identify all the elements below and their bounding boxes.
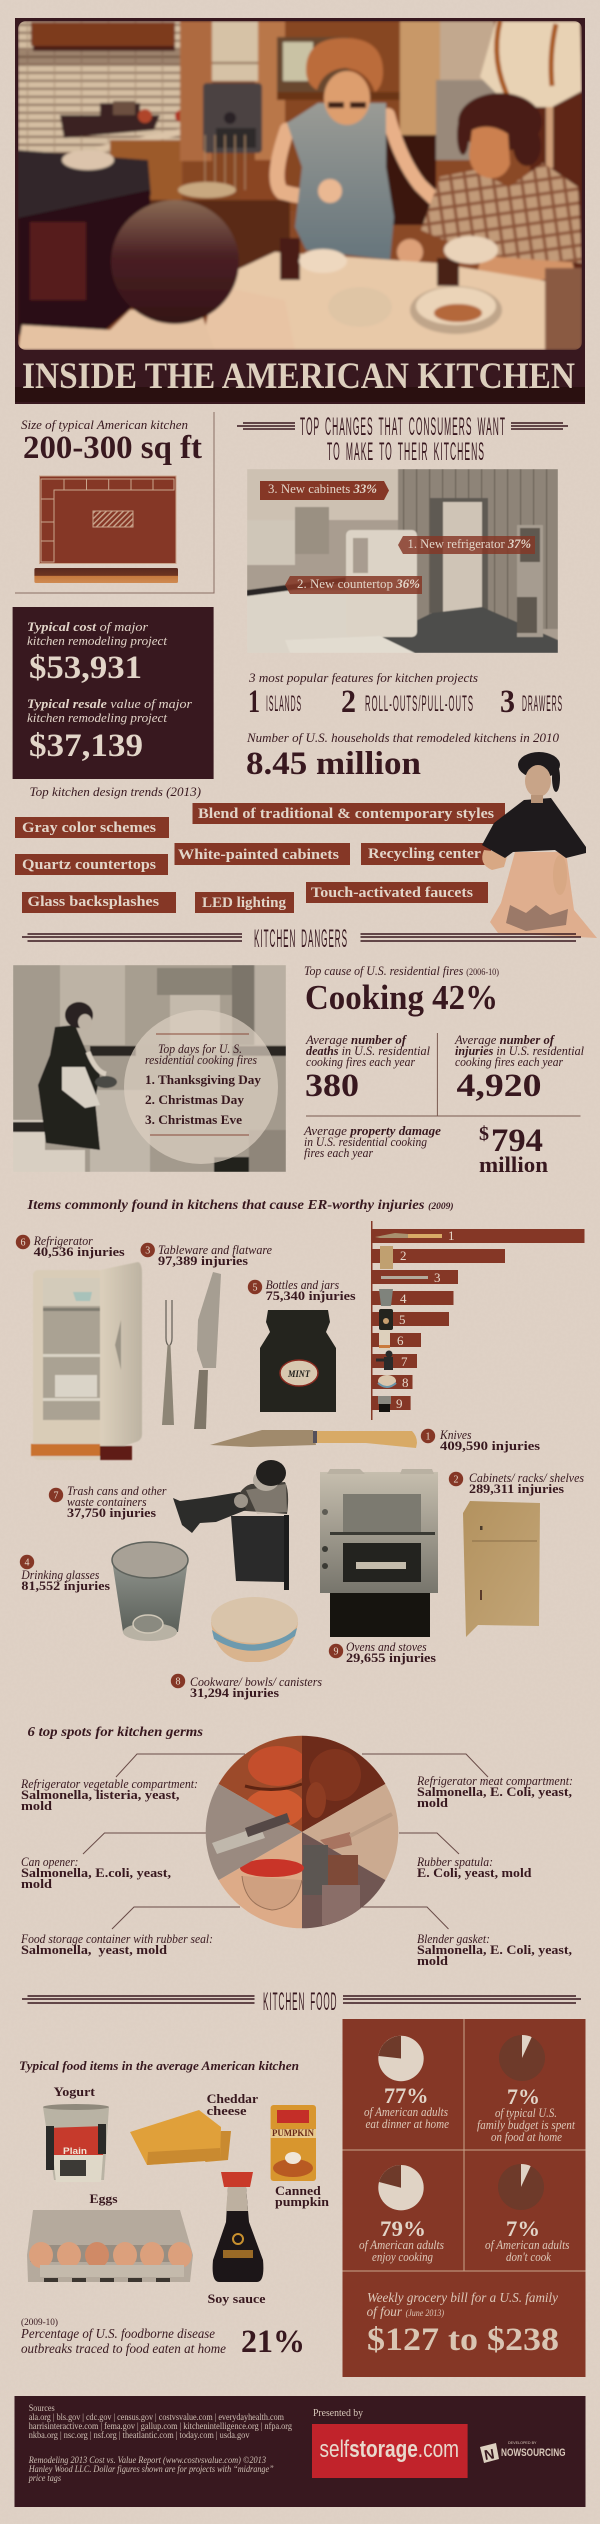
food: cheddar cheese: cheese — [207, 2103, 247, 2118]
icon: knife — [210, 1430, 417, 1448]
heading: germ spots: 6 top spots for kitchen germs — [28, 1725, 204, 1740]
item: knives: 1 — [426, 1432, 430, 1442]
germ label: vegetable compartment: Salmonella, listeria, yeast, — [21, 1787, 180, 1802]
germ label: vegetable compartment: Refrigerator vegetable compartment: — [20, 1776, 198, 1791]
injuries: injuries in U.S. residential — [455, 1043, 584, 1058]
item: tableware: Tableware and flatware — [158, 1242, 272, 1257]
wedge: spatula — [302, 1784, 398, 1880]
bar 7 trash can: 7 — [401, 1354, 408, 1369]
tag: blend: Blend of traditional & contemporary styles — [198, 806, 494, 822]
bar 5 bottles — [372, 1309, 449, 1330]
photo: vintage kitchen with change labels — [247, 469, 558, 653]
stat: 77 percent: of American adults — [364, 2104, 448, 2119]
logo: selfstorage: selfstorage.com — [320, 2436, 459, 2463]
item: bottles and jars — [248, 1277, 356, 1412]
pie 7 budget — [499, 2035, 545, 2081]
stat: foodborne outbreaks — [20, 2317, 305, 2360]
item: ovens and stoves — [320, 1469, 438, 1665]
heading: ER injuries: Items commonly found in kitchens that cause ER-worthy injuries (2009) — [26, 1198, 453, 1213]
item: refrigerator: 40,536 injuries — [34, 1244, 125, 1259]
icon: cabinet — [463, 1501, 540, 1637]
top cause: Cooking 42% — [305, 978, 498, 1017]
item: cabinets: Cabinets/ racks/ shelves — [469, 1470, 584, 1485]
copyright note: price tags — [28, 2473, 61, 2483]
top cause: Top cause of U.S. residential fires (2006-10) — [304, 963, 499, 978]
germ label: can opener: Can opener: — [21, 1854, 78, 1869]
germ label: can opener: mold — [21, 1876, 53, 1891]
stat: 79 percent: enjoy cooking — [372, 2249, 433, 2264]
photo: woman cooking with top days circle — [13, 965, 286, 1172]
item: trash cans: waste containers — [67, 1494, 147, 1509]
logo: nowsourcing: NOWSOURCING — [501, 2447, 566, 2459]
icon: cheese — [130, 2110, 231, 2165]
circle callout: top days — [124, 1010, 278, 1164]
germ label: meat compartment: mold — [417, 1795, 449, 1810]
food: canned pumpkin — [271, 2105, 330, 2209]
item: cookware: 31,294 injuries — [190, 1685, 279, 1700]
feature 3 drawers: 3 — [500, 684, 515, 720]
sources: nkba.org | nsc.org | nsf.org | theatlantic.com | today.com | usda.gov — [29, 2430, 250, 2440]
chart: germ spots pie of photos — [82, 1736, 488, 1930]
tag: touch: Touch-activated faucets — [311, 885, 473, 901]
stat: weekly grocery bill: Weekly grocery bill for a U.S. family — [367, 2291, 559, 2306]
germ label: can opener — [21, 1854, 171, 1891]
stat: 7 percent don't cook: don't cook — [506, 2249, 551, 2264]
item: tableware: 3 — [145, 1246, 150, 1256]
item: ovens and stoves: 9 — [334, 1646, 338, 1658]
item: drinking glasses: 4 — [24, 1558, 30, 1568]
item: cabinets — [449, 1470, 584, 1637]
header photo and title — [15, 18, 585, 404]
top cause — [304, 963, 499, 1017]
bar 2 cabinets: 2 — [400, 1248, 406, 1263]
injuries — [454, 1032, 584, 1104]
tag: white cabinets: White-painted cabinets — [178, 847, 339, 863]
logo: nowsourcing — [480, 2441, 566, 2463]
typical cost: Typical cost of major — [27, 619, 149, 634]
item: drinking glasses: 81,552 injuries — [21, 1578, 110, 1593]
households stat: 8.45 million — [246, 746, 421, 782]
typical cost — [27, 619, 167, 686]
item: refrigerator — [16, 1233, 142, 1460]
stat: 7 percent budget: family budget is spent — [477, 2117, 575, 2132]
heading: typical food: Typical food items in the average American kitchen — [19, 2058, 299, 2073]
sources: Sources — [29, 2403, 55, 2413]
stat: 77 percent: 77% — [384, 2083, 429, 2108]
stat: 79 percent — [359, 2165, 444, 2264]
germ label: blender gasket: Salmonella, E. Coli, yeast, — [417, 1942, 572, 1957]
food: yogurt: Yogurt — [54, 2084, 96, 2099]
item: cookware: 8 — [176, 1676, 180, 1688]
germ label: vegetable compartment — [20, 1776, 198, 1813]
icon: bowl — [211, 1597, 298, 1662]
design trends: Top kitchen design trends (2013) — [30, 784, 201, 799]
stat: 7 percent budget: 7% — [507, 2084, 540, 2109]
copyright note: Remodeling 2013 Cost vs. Value Report (www.costvsvalue.com) ©2013 — [28, 2455, 266, 2465]
bar 2 cabinets — [372, 1246, 505, 1269]
heading: kitchen food — [22, 1988, 581, 2016]
stat: 79 percent: 79% — [380, 2216, 426, 2241]
typical resale value: kitchen remodeling project — [27, 710, 167, 725]
deaths: Average number of — [305, 1032, 408, 1047]
icon: yogurt tub: Plain — [63, 2146, 87, 2156]
item: tableware: 97,389 injuries — [158, 1253, 248, 1268]
stat: 77 percent: eat dinner at home — [366, 2116, 449, 2131]
stat: weekly grocery bill: (June 2013) — [406, 2308, 444, 2318]
presented by: Presented by — [313, 2408, 363, 2419]
typical resale value — [27, 696, 193, 764]
wedge: can opener — [206, 1784, 302, 1880]
deaths: cooking fires each year — [306, 1054, 416, 1069]
bar 1 knives: 1 — [448, 1228, 454, 1243]
photo: family dinner in kitchen — [18, 21, 582, 350]
panel: remodeling cost — [13, 607, 214, 779]
diner from behind — [18, 198, 240, 350]
feature 3 drawers — [500, 684, 563, 720]
stat: 7 percent budget: on food at home — [491, 2129, 562, 2144]
panel: kitchen size — [15, 412, 214, 593]
injuries: 4,920 — [456, 1068, 542, 1104]
heading: kitchen food: KITCHEN FOOD — [263, 1988, 338, 2016]
item: tableware — [140, 1242, 272, 1429]
item: knives — [210, 1427, 540, 1453]
logo: nowsourcing: N — [483, 2445, 496, 2463]
bar 4 glasses — [372, 1289, 454, 1306]
stat: weekly grocery bill: of four — [367, 2305, 403, 2320]
bar 6 refrigerator: 6 — [397, 1333, 404, 1348]
feature 2 roll-outs: 2 — [341, 684, 356, 720]
icon: boy in trash can — [173, 1460, 289, 1590]
typical cost: $53,931 — [29, 650, 142, 686]
tag: recycling — [361, 843, 491, 865]
deaths: deaths in U.S. residential — [306, 1043, 430, 1058]
pie 79 — [378, 2165, 424, 2210]
table with dishes — [199, 236, 582, 350]
bar 8 cookware — [372, 1375, 412, 1390]
bar 4 glasses: 4 — [400, 1291, 407, 1306]
tag: quartz: Quartz countertops — [22, 857, 156, 873]
germ label: blender gasket: Blender gasket: — [417, 1931, 490, 1946]
item: bottles and jars: 5 — [252, 1282, 258, 1294]
injuries: cooking fires each year — [455, 1054, 564, 1069]
food: canned pumpkin: Canned — [275, 2183, 321, 2198]
sources: harrisinteractive.com | fema.gov | gallup.com | kitchenintelligence.org | nfpa.org — [29, 2421, 292, 2431]
item: bottles and jars: 75,340 injuries — [266, 1288, 356, 1303]
copyright note — [28, 2455, 274, 2483]
item: trash cans — [49, 1460, 289, 1590]
woman serving — [268, 36, 437, 260]
bar 8 cookware: 8 — [402, 1375, 408, 1390]
wedge: container — [218, 1832, 304, 1928]
illustration: woman in apron — [482, 752, 597, 938]
item: drinking glasses — [20, 1542, 188, 1641]
stat: foodborne outbreaks: outbreaks traced to food eaten at home — [21, 2342, 226, 2357]
sources: ala.org | bls.gov | cdc.gov | census.gov | costvsvalue.com | everydayhealth.com — [29, 2412, 284, 2422]
stat: foodborne outbreaks: Percentage of U.S. foodborne disease — [20, 2327, 215, 2342]
circle callout: top days: 1. Thanksgiving Day — [145, 1072, 262, 1087]
icon: fork and knife — [162, 1272, 221, 1429]
bar 9 ovens — [372, 1396, 411, 1412]
ruler — [34, 568, 178, 583]
label: new cabinets: 3. New cabinets 33% — [268, 481, 377, 496]
item: knives: 409,590 injuries — [440, 1438, 540, 1453]
icon: soy bottle — [213, 2172, 263, 2282]
item: cabinets: 2 — [454, 1474, 458, 1486]
heading: kitchen dangers: KITCHEN DANGERS — [254, 925, 348, 953]
stat: 7 percent don't cook: of American adults — [485, 2237, 570, 2252]
size value: 200-300 sq ft — [23, 430, 202, 466]
food: canned pumpkin: pumpkin — [275, 2194, 330, 2209]
stat: 77 percent — [364, 2036, 449, 2131]
property damage: million — [479, 1152, 548, 1177]
bar 3 tableware: 3 — [434, 1270, 440, 1285]
germ label: meat compartment: Refrigerator meat compartment: — [416, 1773, 573, 1788]
icon: oven — [320, 1469, 438, 1637]
property damage: in U.S. residential cooking — [304, 1134, 427, 1149]
tag: gray — [15, 817, 169, 838]
stat: weekly grocery bill — [367, 2291, 559, 2358]
label: new refrigerator: 1. New refrigerator 37% — [408, 536, 531, 551]
stat: foodborne outbreaks: 21% — [241, 2324, 305, 2360]
tag: glass: Glass backsplashes — [28, 894, 159, 910]
feature 1 islands — [248, 684, 302, 720]
stat: 7 percent budget: of typical U.S. — [495, 2105, 557, 2120]
wedge: vegetables — [218, 1736, 302, 1832]
wedge: blender — [302, 1832, 386, 1928]
item: refrigerator: 6 — [20, 1238, 26, 1248]
logo: nowsourcing: DEVELOPED BY — [508, 2441, 537, 2445]
bar 5 bottles: 5 — [399, 1312, 406, 1327]
item: drinking glasses: Drinking glasses — [21, 1567, 99, 1582]
bar 9 ovens: 9 — [396, 1396, 402, 1411]
germ label: can opener: Salmonella, E.coli, yeast, — [21, 1865, 171, 1880]
food: cheddar cheese: Cheddar — [207, 2091, 258, 2106]
item: refrigerator: Refrigerator — [33, 1233, 94, 1248]
tag: recycling: Recycling center — [368, 846, 481, 862]
item: trash cans: 37,750 injuries — [67, 1505, 156, 1520]
item: ovens and stoves: Ovens and stoves — [346, 1639, 427, 1654]
germ label: rubber spatula: E. Coli, yeast, mold — [417, 1865, 532, 1880]
germ label: food storage: Food storage container with rubber seal: — [20, 1931, 213, 1946]
bar 1 knives — [372, 1228, 584, 1243]
stat: 7 percent don't cook: 7% — [506, 2216, 540, 2241]
icon: refrigerator — [31, 1262, 142, 1460]
typical resale value: $37,139 — [29, 728, 143, 764]
property damage — [303, 1123, 548, 1177]
property damage: Average property damage — [303, 1123, 441, 1138]
bar 6 refrigerator — [372, 1330, 421, 1350]
wedge: meat — [302, 1736, 386, 1832]
food: eggs — [27, 2191, 193, 2282]
icon: egg carton — [27, 2210, 193, 2282]
food: cheddar cheese — [130, 2091, 258, 2165]
stat: 7 percent don't cook — [485, 2164, 570, 2264]
circle callout: top days: 2. Christmas Day — [145, 1092, 245, 1107]
item: cookware: Cookware/ bowls/ canisters — [190, 1674, 322, 1689]
bar 3 tableware — [372, 1270, 458, 1285]
tag: led: LED lighting — [202, 895, 286, 911]
item: cookware — [171, 1597, 322, 1700]
property damage: 794 — [491, 1123, 543, 1159]
germ label: meat compartment: Salmonella, E. Coli, yeast, — [417, 1784, 572, 1799]
stat: foodborne outbreaks: (2009-10) — [21, 2317, 58, 2327]
item: cabinets: 289,311 injuries — [469, 1481, 564, 1496]
food: soy sauce: Soy sauce — [208, 2291, 266, 2306]
germ label: rubber spatula: Rubber spatula: — [416, 1854, 493, 1869]
sources — [29, 2403, 292, 2440]
germ label: food storage: Salmonella, yeast, mold — [21, 1942, 168, 1957]
icon: jar: MINT — [287, 1369, 310, 1379]
stove — [18, 150, 152, 335]
item: trash cans: 7 — [54, 1490, 58, 1502]
germ label: food storage — [20, 1931, 213, 1957]
feature 2 roll-outs — [341, 684, 474, 720]
stat: 79 percent: of American adults — [359, 2237, 444, 2252]
icon: can: PUMPKIN — [272, 2128, 314, 2138]
popular features — [248, 670, 563, 720]
deaths — [305, 1032, 430, 1104]
tag: gray: Gray color schemes — [22, 820, 156, 836]
logo: selfstorage — [312, 2424, 468, 2478]
feature 1 islands: 1 — [248, 684, 260, 720]
label: new cabinets — [260, 481, 389, 500]
item: knives: Knives — [439, 1427, 472, 1442]
stat: weekly grocery bill: $127 to $238 — [367, 2322, 559, 2358]
footer — [14, 2396, 586, 2507]
property damage: $ — [479, 1123, 489, 1145]
panel: food statistics — [342, 2019, 586, 2377]
germ label: blender gasket — [417, 1931, 572, 1968]
label: new countertop: 2. New countertop 36% — [297, 576, 420, 591]
popular features: 3 most popular features for kitchen projects — [248, 670, 478, 685]
circle callout: top days: residential cooking fires — [145, 1052, 257, 1067]
germ label: blender gasket: mold — [417, 1953, 449, 1968]
germ label: vegetable compartment: mold — [21, 1798, 53, 1813]
deaths: 380 — [305, 1068, 359, 1104]
tag: led — [195, 892, 294, 913]
germ label: rubber spatula — [416, 1854, 532, 1880]
pie 7 no cook — [498, 2164, 544, 2210]
item: ovens and stoves: 29,655 injuries — [346, 1650, 436, 1665]
size label: Size of typical American kitchen — [21, 417, 188, 432]
item: bottles and jars: Bottles and jars — [266, 1277, 339, 1292]
pie 77 — [378, 2036, 424, 2081]
injuries: Average number of — [454, 1032, 556, 1047]
item: trash cans: Trash cans and other — [67, 1483, 167, 1498]
circle callout: top days: 3. Christmas Eve — [145, 1112, 242, 1127]
bar 7 trash can — [372, 1350, 417, 1370]
tag: blend — [192, 803, 505, 824]
typical cost: kitchen remodeling project — [27, 633, 167, 648]
households stat — [246, 730, 559, 782]
heading: top changes — [237, 413, 568, 466]
property damage: fires each year — [304, 1145, 374, 1160]
panel: fire statistics — [303, 963, 584, 1177]
households stat: Number of U.S. households that remodeled kitchens in 2010 — [246, 730, 559, 745]
food: yogurt — [43, 2084, 109, 2182]
tag: touch — [306, 882, 488, 903]
bar chart: injuries by item — [371, 1221, 584, 1420]
young man with plaid shirt — [397, 93, 582, 268]
floor plan diagram — [40, 476, 176, 564]
tag: white cabinets — [174, 843, 350, 865]
tag: quartz — [15, 854, 168, 875]
typical resale value: Typical resale value of major — [27, 696, 193, 711]
stat: 7 percent budget — [477, 2035, 575, 2144]
tag: glass — [22, 892, 176, 913]
circle callout: top days: Top days for U. S. — [158, 1041, 242, 1056]
food: eggs: Eggs — [90, 2191, 118, 2206]
copyright note: Hanley Wood LLC. Dollar figures shown are for projects with “midrange” — [28, 2464, 274, 2474]
icon: glass — [112, 1542, 188, 1641]
popular features: ISLANDS — [266, 691, 302, 716]
germ label: meat compartment — [416, 1773, 573, 1810]
design trends — [15, 784, 505, 913]
food: soy sauce — [208, 2172, 266, 2306]
heading: kitchen dangers — [22, 925, 581, 953]
